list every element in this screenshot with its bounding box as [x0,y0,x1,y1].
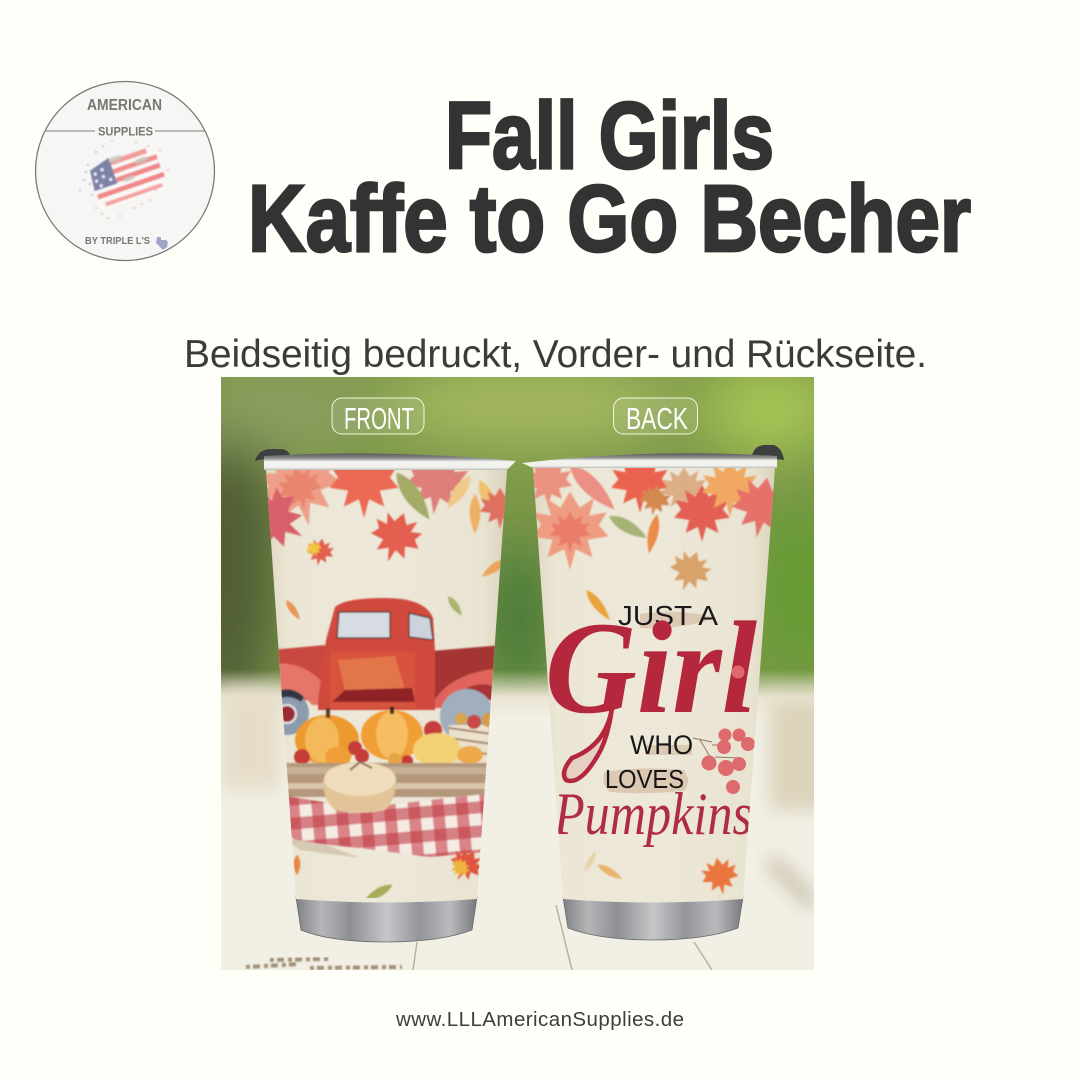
logo text: American: AMERICAN [87,97,162,114]
back tumbler artwork [533,468,774,895]
tumbler: back [522,445,796,940]
dirt at table edge [246,959,402,968]
tumbler: front [255,449,516,942]
logo icon: small Texas mark [156,237,168,250]
back artwork highlights [603,612,716,793]
subtitle: Beidseitig bedruckt, Vorder- und Rückseite. [184,333,927,376]
front tumbler body [266,470,507,902]
back tumbler steel base [563,897,743,940]
back text: Girl: Girl [545,594,757,741]
back maple leaves [533,468,774,620]
truck rear wheel [439,688,491,736]
pumpkins [294,707,499,767]
back bottom leaves [582,850,741,898]
right crate [448,712,490,763]
logo divider line [46,130,205,132]
berries [693,666,755,794]
gingham cloth [280,793,492,857]
truck hood and front fender [278,644,326,701]
logo text: Supplies: SUPPLIES [98,126,153,138]
front tumbler artwork [266,470,506,898]
footer website: www.LLLAmericanSupplies.de [395,1008,684,1031]
logo text: By Triple L's: BY TRIPLE L'S [85,236,150,247]
label: Front: FRONT [344,401,414,436]
front tumbler lid [255,449,516,470]
label: Back: BACK [626,401,688,436]
truck windows [337,612,390,638]
wooden crate [282,763,500,797]
product photo [221,377,814,970]
truck cab [318,598,435,710]
back text: Who: WHO [630,730,693,760]
pumpkin orange left [295,708,359,765]
front bottom leaves [292,839,480,898]
back text: Pumpkins: Pumpkins [553,781,752,847]
pumpkin yellow [413,733,461,767]
decorative swash under Girl [564,708,612,781]
label: Front [332,398,424,436]
truck [278,597,495,736]
canvas wrapped pumpkin [323,762,396,813]
truck front wheel [282,696,310,736]
truck bed and rear fender [434,644,495,701]
pumpkin orange right [361,707,423,760]
back tumbler lid [522,445,784,468]
label: Back [614,398,698,436]
logo: American Supplies badge [36,82,214,260]
back text: Loves: LOVES [605,764,684,794]
title [248,83,971,272]
logo icon: distressed American flag [79,140,169,219]
back tumbler body [533,468,775,902]
title line 1: Fall Girls [445,83,774,189]
photo background: wooden table [221,670,830,970]
back text: Just a: JUST A [618,600,718,631]
photo background: blurred foliage [221,377,814,696]
front tumbler steel base [296,897,477,942]
front maple leaves [266,470,506,620]
